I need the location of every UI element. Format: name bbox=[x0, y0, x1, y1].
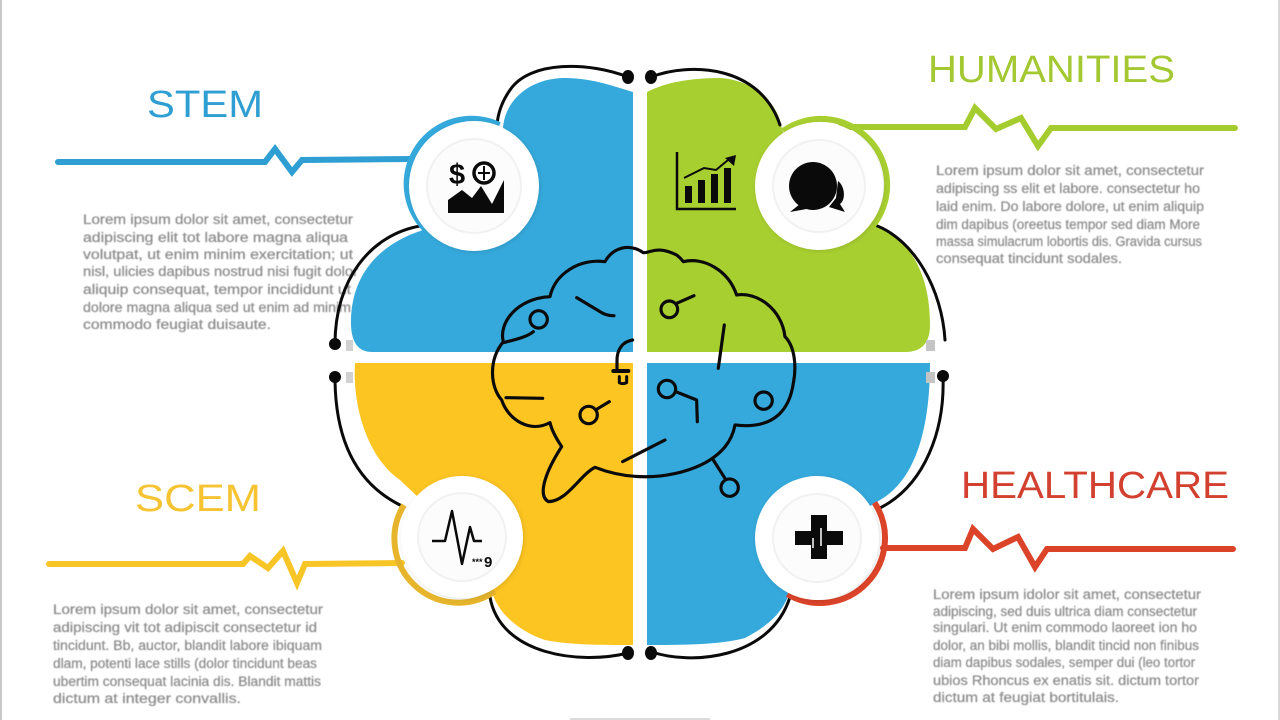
text block: Healthcare: diam dapibus sodales, semper dui (leo tortor bbox=[933, 655, 1195, 670]
heading: STEM: STEM bbox=[147, 84, 263, 126]
text block: Healthcare: adipiscing, sed duis ultrica diam consectetur bbox=[933, 604, 1197, 619]
text block: SCEM: adipiscing vit tot adipiscit consectetur id bbox=[53, 620, 317, 635]
icon: pulse: 9 bbox=[484, 554, 492, 571]
heading: HUMANITIES: HUMANITIES bbox=[928, 49, 1175, 91]
text block: Humanities: adipiscing ss elit et labore. consectetur ho bbox=[936, 181, 1200, 196]
icon: rising bar chart bbox=[677, 152, 736, 209]
text block: Healthcare: dolor, an bibi mollis, blandit tincid non finibus bbox=[933, 638, 1199, 653]
text block: Healthcare: dictum at feugiat bortitulais. bbox=[933, 690, 1119, 705]
icon: speech bubbles bbox=[789, 162, 845, 212]
text block: STEM: Lorem ipsum dolor sit amet, consectetur bbox=[83, 212, 354, 227]
outer black outline with end dots bbox=[329, 66, 949, 660]
panel: STEM quadrant bbox=[351, 78, 633, 352]
icon: medical cross bbox=[795, 515, 843, 559]
heading: HEALTHCARE: HEALTHCARE bbox=[961, 465, 1229, 507]
text block: SCEM: Lorem ipsum dolor sit amet, consectetur bbox=[53, 602, 324, 617]
text block: Humanities bbox=[936, 163, 1205, 266]
text block: STEM bbox=[83, 212, 359, 332]
STEM icon badge bbox=[407, 119, 539, 251]
icon: pulse: *** bbox=[472, 557, 483, 567]
SCEM connector line bbox=[49, 551, 402, 583]
text block: Humanities: laid enim. Do labore dolore, ut enim aliquip bbox=[936, 199, 1204, 214]
text block: Humanities: dim dapibus (oreetus tempor sed diam More bbox=[936, 217, 1200, 232]
SCEM icon badge bbox=[394, 476, 523, 603]
text block: Healthcare: singulari. Ut enim commodo laoreet ion ho bbox=[933, 620, 1197, 635]
panel: Healthcare quadrant bbox=[647, 363, 930, 645]
Humanities connector line bbox=[840, 108, 1235, 146]
text block: STEM: volutpat, ut enim minim exercitation; ut bbox=[83, 247, 353, 262]
Healthcare icon badge bbox=[755, 476, 885, 603]
text block: SCEM: tincidunt. Bb, auctor, blandit labore ibiquam bbox=[53, 638, 322, 653]
text block: Healthcare: Lorem ipsum idolor sit amet, consectetur bbox=[933, 587, 1202, 602]
text block: STEM: commodo feugiat duisaute. bbox=[83, 317, 271, 332]
text block: Healthcare bbox=[933, 587, 1202, 705]
text block: STEM: dolore magna aliqua sed ut enim ad minim bbox=[83, 300, 351, 315]
heading: SCEM: SCEM bbox=[135, 478, 261, 520]
panel: Humanities quadrant bbox=[647, 78, 930, 352]
text block: SCEM bbox=[53, 602, 324, 706]
text block: STEM: nisl, ulicies dapibus nostrud nisi fugit dolor bbox=[83, 264, 359, 279]
text block: SCEM: ubertim consequat lacinia dis. Blandit mattis bbox=[53, 674, 321, 689]
text block: SCEM: dlam, potenti lace stills (dolor tincidunt beas bbox=[53, 656, 317, 671]
icon: money and chart: $ bbox=[449, 159, 465, 191]
panel: SCEM quadrant bbox=[355, 363, 633, 645]
text block: SCEM: dictum at integer convallis. bbox=[53, 691, 241, 706]
Healthcare connector line bbox=[883, 529, 1233, 567]
text block: Healthcare: ubios Rhoncus ex enatis sit. dictum tortor bbox=[933, 673, 1200, 688]
STEM connector line bbox=[58, 149, 412, 172]
icon: pulse bbox=[432, 511, 492, 571]
Humanities icon badge bbox=[755, 119, 887, 250]
text block: STEM: aliquip consequat, tempor incididunt ut bbox=[83, 282, 351, 297]
text block: Humanities: massa simulacrum lobortis dis. Gravida cursus bbox=[936, 234, 1202, 249]
brain outline with circuit nodes bbox=[492, 247, 795, 502]
text block: Humanities: Lorem ipsum dolor sit amet, consectetur bbox=[936, 163, 1205, 178]
text block: STEM: adipiscing elit tot labore magna aliqua bbox=[83, 230, 349, 245]
text block: Humanities: consequat tincidunt sodales. bbox=[936, 251, 1122, 266]
